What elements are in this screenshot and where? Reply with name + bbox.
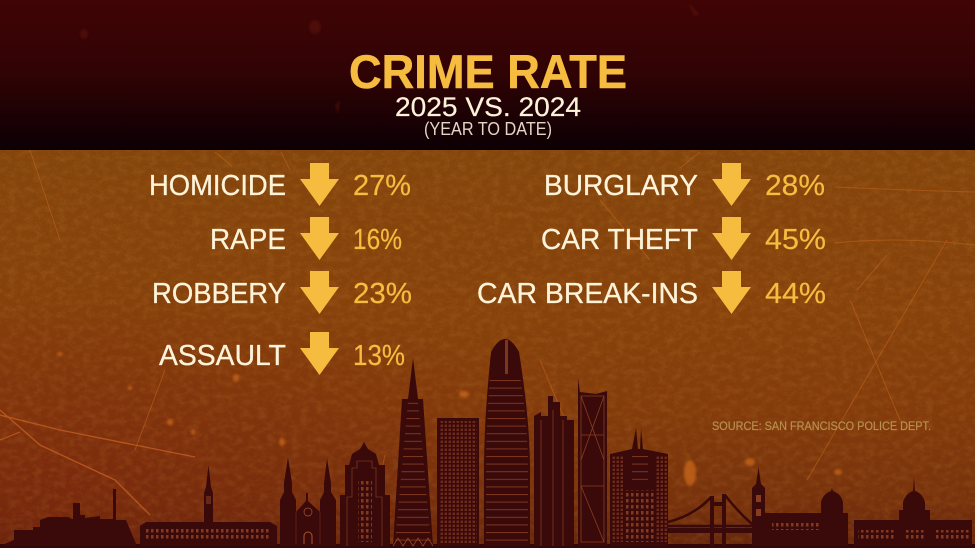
stat: car theft: 45% bbox=[765, 224, 826, 256]
stat: car break-ins bbox=[477, 271, 826, 314]
ground strip bbox=[0, 544, 975, 548]
landmark: stepped tower bbox=[534, 396, 574, 546]
background: fine grain bbox=[0, 150, 975, 548]
background: lower orange panel bbox=[0, 150, 975, 548]
landmark: grid tower bbox=[437, 418, 479, 546]
landmark: domed hall bbox=[765, 488, 848, 546]
background: top dark header band bbox=[0, 0, 975, 150]
background: grunge scratches and blotches bbox=[0, 150, 975, 515]
landmark: rounded skyscraper bbox=[484, 339, 530, 546]
stat: burglary: 28% bbox=[765, 170, 825, 202]
background: mottled texture bbox=[0, 150, 975, 548]
stat: robbery: ROBBERY bbox=[152, 278, 286, 310]
stat: car break-ins: CAR BREAK-INS bbox=[477, 278, 698, 310]
stat: car break-ins: 44% bbox=[765, 278, 826, 310]
subtitle: 2025 VS. 2024 bbox=[395, 92, 581, 122]
skyline bbox=[0, 339, 975, 548]
landmark: ferry building bbox=[140, 465, 277, 546]
stat: burglary: BURGLARY bbox=[544, 170, 698, 202]
landmark: suspension bridge bbox=[668, 494, 752, 546]
landmark: art deco tower bbox=[340, 442, 390, 546]
title: CRIME RATE bbox=[349, 45, 627, 98]
stat: assault: 13% bbox=[353, 340, 405, 372]
landmark: slanted top tower bbox=[578, 378, 607, 546]
landmark: island with chimney and water tower bbox=[0, 489, 137, 546]
stat: assault: ASSAULT bbox=[159, 340, 286, 372]
stat: robbery: 23% bbox=[353, 278, 412, 310]
background: red tint lower left bbox=[0, 150, 975, 548]
stat: car theft: CAR THEFT bbox=[541, 224, 698, 256]
background: header spots bbox=[80, 2, 700, 115]
landmark: church bbox=[280, 457, 336, 546]
stat: assault bbox=[159, 332, 405, 375]
stat: rape: RAPE bbox=[210, 224, 286, 256]
stat: rape: 16% bbox=[353, 224, 402, 256]
date note: (YEAR TO DATE) bbox=[424, 119, 552, 139]
stat: homicide: HOMICIDE bbox=[149, 170, 286, 202]
landmark: bell tower bbox=[752, 467, 765, 546]
stat: burglary bbox=[544, 163, 825, 206]
landmark: city hall bbox=[854, 477, 972, 546]
stat: rape bbox=[210, 217, 402, 260]
stat: car theft bbox=[541, 217, 826, 260]
landmark: pyramid tower bbox=[393, 358, 433, 546]
stat: homicide: 27% bbox=[353, 170, 411, 202]
source note: SOURCE: SAN FRANCISCO POLICE DEPT. bbox=[712, 419, 931, 433]
stat: homicide bbox=[149, 163, 411, 206]
landmark: twin antenna building bbox=[610, 428, 668, 546]
stat: robbery bbox=[152, 271, 412, 314]
